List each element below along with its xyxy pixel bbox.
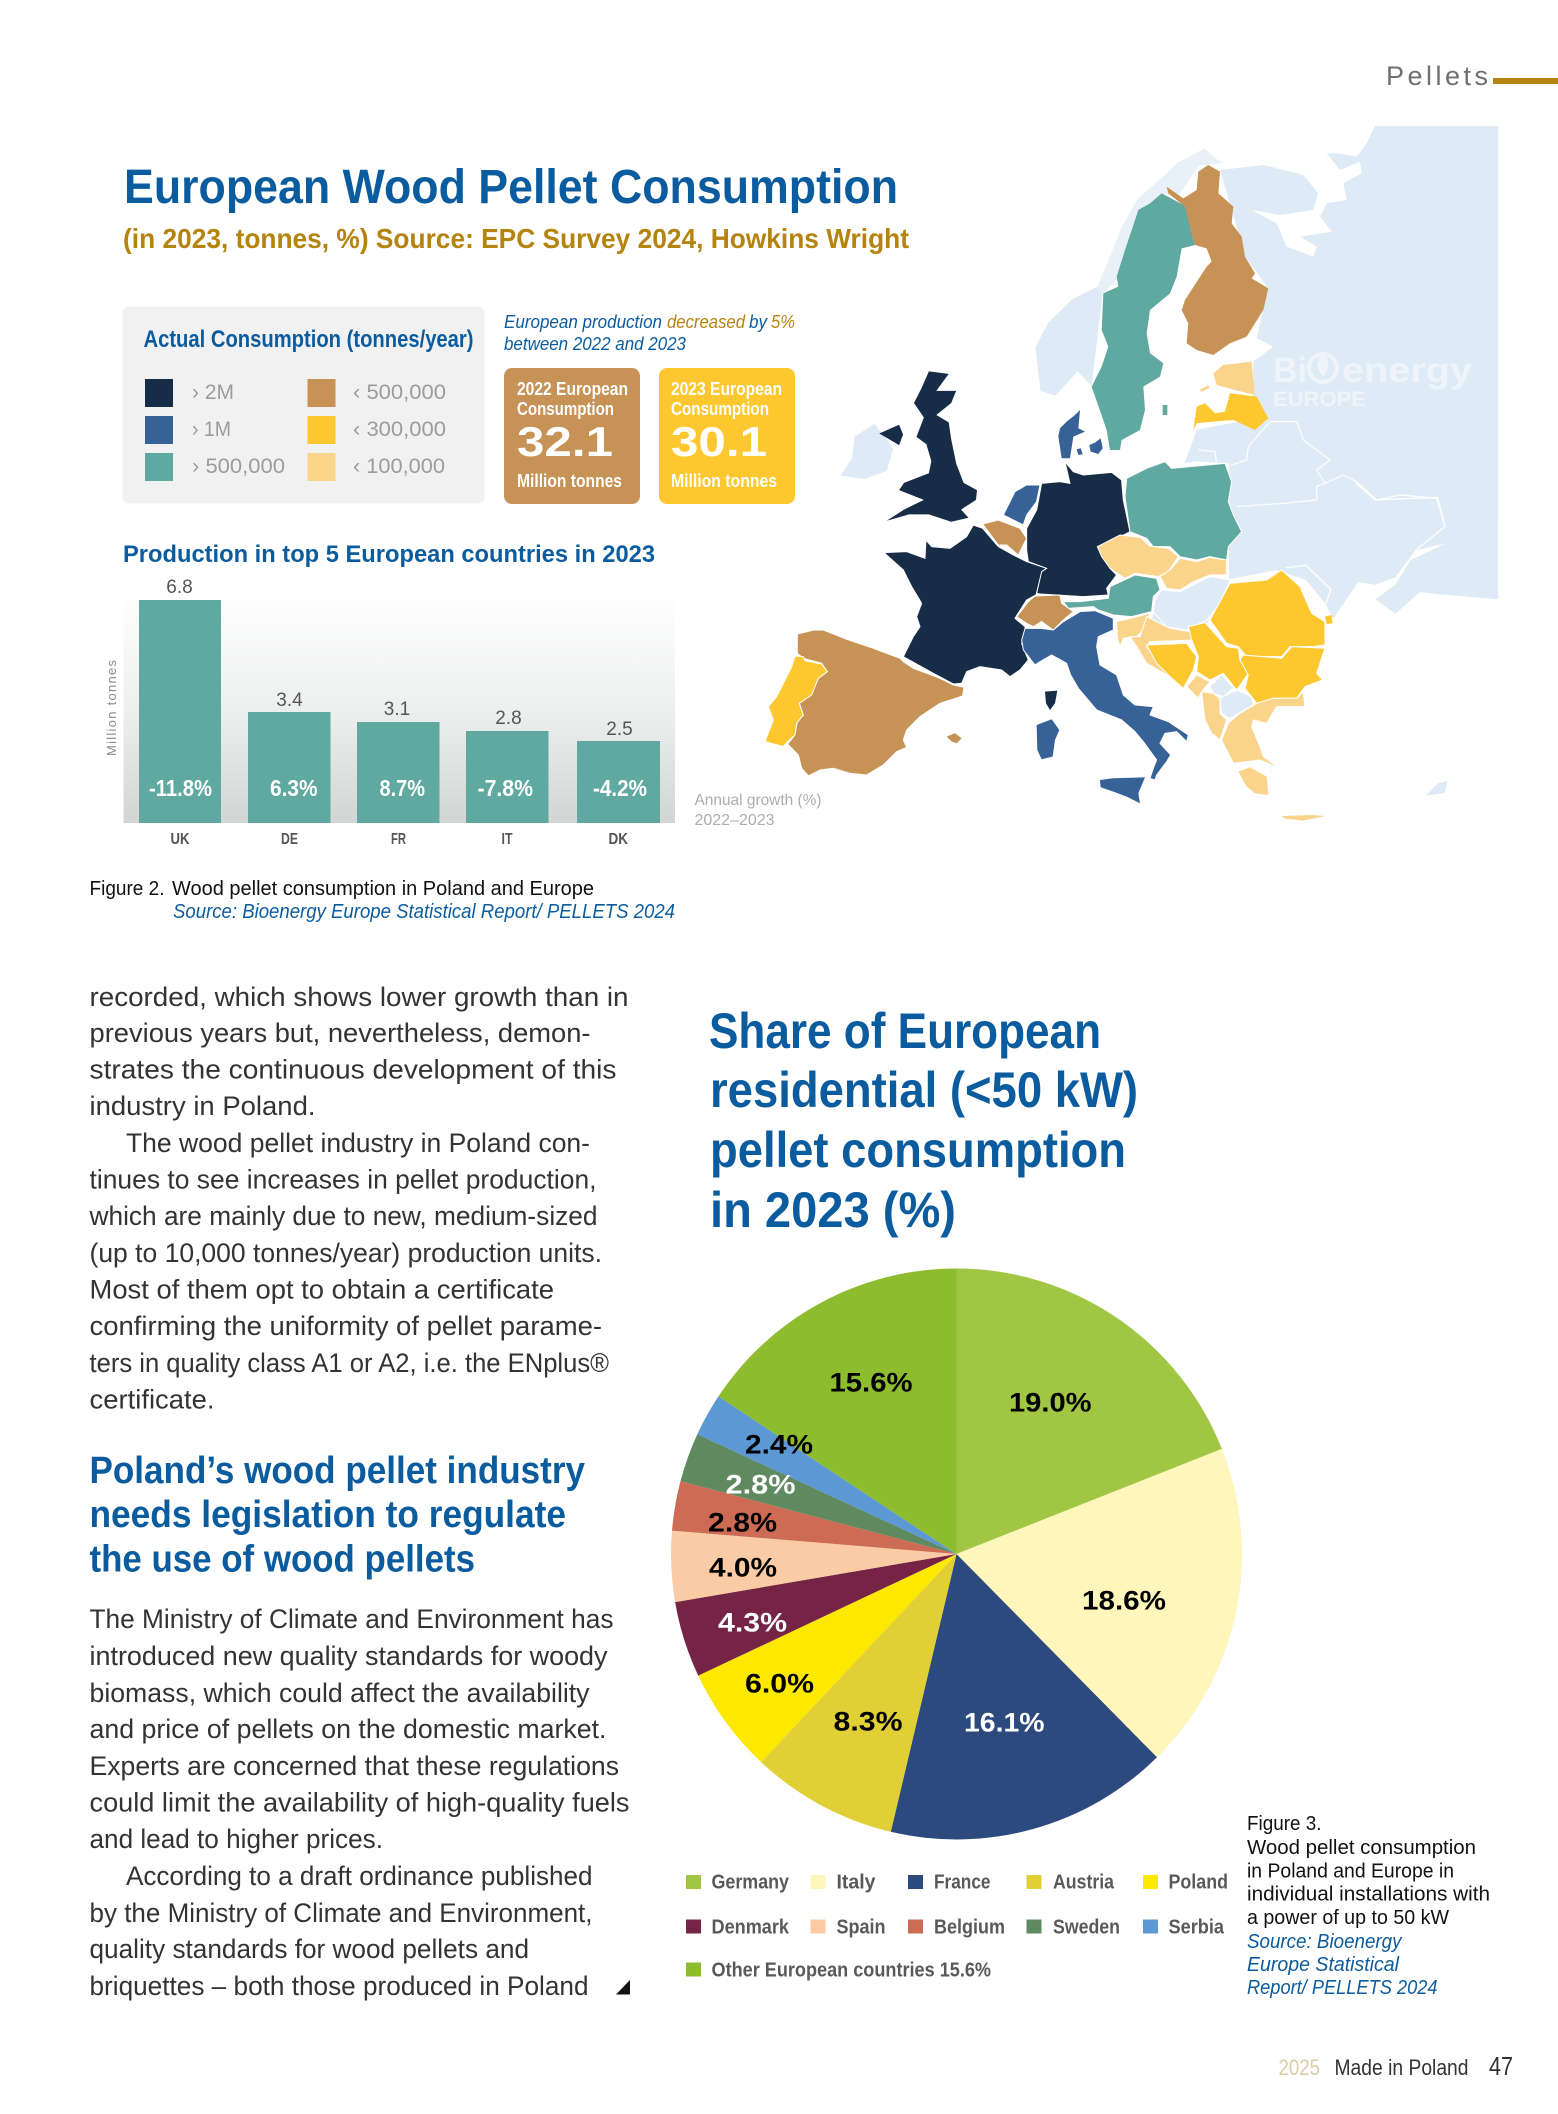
legend: Serbia: Serbia bbox=[1168, 1916, 1225, 1938]
figure 3 caption: Europe Statistical bbox=[1247, 1954, 1400, 1976]
map: western countries bbox=[765, 462, 1130, 776]
legend: Austria bbox=[1026, 1872, 1115, 1894]
slice: Sweden bbox=[680, 1434, 956, 1554]
slice: Italy bbox=[956, 1449, 1242, 1757]
text block: article intro: which are mainly due to new, medium-sized bbox=[89, 1201, 598, 1231]
country: Austria bbox=[1063, 575, 1160, 617]
text block: article intro: strates the continuous development of this bbox=[90, 1054, 616, 1084]
pie value labels: 4.3% bbox=[718, 1608, 787, 1638]
bar chart: production in top 5 countries bbox=[124, 577, 675, 848]
slice: Other European countries bbox=[718, 1268, 956, 1554]
page header: section name: Pellets bbox=[1386, 61, 1488, 91]
legend: Poland: Poland bbox=[1168, 1872, 1228, 1894]
legend: France: France bbox=[934, 1872, 990, 1894]
callout: production decrease note bbox=[504, 312, 795, 354]
legend: Germany: Germany bbox=[712, 1872, 790, 1894]
slice: Austria bbox=[761, 1554, 956, 1832]
country: Serbia bbox=[1188, 623, 1248, 690]
chart heading: Production in top 5 European countries in 2023 bbox=[123, 541, 655, 568]
pie chart: residential pellet consumption shares bbox=[671, 1268, 1242, 1839]
country: Denmark bbox=[1058, 410, 1085, 458]
text block: article intro: certificate. bbox=[90, 1384, 214, 1414]
text block: article continued: Experts are concerned that these regulations bbox=[90, 1751, 619, 1781]
map: Russia and north-east bbox=[1220, 126, 1498, 520]
text block: article intro: confirming the uniformity of pellet parame- bbox=[90, 1311, 602, 1341]
country: Peloponnese bbox=[1238, 767, 1268, 795]
page footer: Made in Poland bbox=[1334, 2055, 1468, 2080]
pie chart heading: residential (<50 kW) bbox=[710, 1062, 1138, 1118]
callout: production decrease note: decreased bbox=[667, 312, 746, 332]
legend entry: under 100,000 bbox=[308, 453, 445, 481]
text block: article intro: industry in Poland. bbox=[90, 1091, 316, 1121]
pie chart heading: pellet consumption bbox=[710, 1122, 1126, 1178]
country: Crete bbox=[1282, 815, 1325, 821]
bar: FR: 8.7% bbox=[380, 775, 425, 801]
bar: DK: 2.5 bbox=[606, 719, 633, 740]
country: Croatia bbox=[1130, 617, 1193, 688]
pie chart heading: Share of European bbox=[709, 1003, 1101, 1059]
country: Romania bbox=[1210, 570, 1325, 657]
legend entry: under 500,000 bbox=[308, 379, 446, 407]
text block: article intro: ters in quality class A1 or A2, i.e. the ENplus® bbox=[90, 1348, 609, 1378]
country: Montenegro bbox=[1187, 675, 1210, 698]
legend: Sweden: Sweden bbox=[1053, 1916, 1120, 1938]
legend entry: over 2M bbox=[145, 379, 234, 407]
country: Finland bbox=[1167, 165, 1268, 355]
country: Gotland bbox=[1163, 405, 1167, 415]
map: United Kingdom bbox=[879, 371, 977, 522]
figure 3 caption: Wood pellet consumption bbox=[1247, 1837, 1476, 1859]
pie value labels: 2.4% bbox=[745, 1430, 813, 1460]
country: Bosnia bbox=[1147, 643, 1197, 688]
country: Estonia bbox=[1213, 362, 1255, 395]
legend: Belgium: Belgium bbox=[934, 1916, 1005, 1938]
legend: Italy: Italy bbox=[836, 1872, 876, 1894]
figure 2 caption: Wood pellet consumption in Poland and Europe bbox=[172, 878, 594, 900]
stat card: 2023 consumption: Consumption bbox=[671, 399, 769, 419]
slice: France bbox=[891, 1554, 1157, 1839]
bar: FR: 3.1 bbox=[384, 699, 410, 720]
bar: FR: FR bbox=[391, 831, 406, 848]
bar: IT: IT bbox=[502, 831, 513, 848]
map: Belarus, Ukraine and Lithuania bbox=[1152, 342, 1498, 631]
bar: UK: UK bbox=[170, 831, 190, 848]
legend entry: under 300,000: ‹ 300,000 bbox=[353, 418, 446, 441]
legend entry: under 100,000: ‹ 100,000 bbox=[353, 455, 445, 478]
map: northern countries bbox=[1058, 165, 1268, 458]
section heading: the use of wood pellets bbox=[90, 1538, 475, 1580]
section heading bbox=[90, 1450, 585, 1580]
figure 3 caption: individual installations with bbox=[1247, 1884, 1490, 1906]
stat card: 2023 consumption bbox=[659, 368, 795, 504]
country: Portugal bbox=[765, 656, 827, 747]
country: Sicily bbox=[1100, 777, 1145, 803]
bar: DK: DK bbox=[608, 831, 628, 848]
figure 2 caption bbox=[90, 878, 675, 923]
legend entry: over 1M: › 1M bbox=[192, 418, 231, 441]
pie value labels bbox=[708, 1368, 1166, 1738]
page header: section name bbox=[1386, 61, 1558, 91]
bar: IT: -7.8% bbox=[478, 775, 533, 801]
title: European Wood Pellet Consumption bbox=[124, 161, 898, 214]
subtitle: (in 2023, tonnes, %) Source: EPC Survey 2024, Howkins Wright bbox=[123, 223, 909, 254]
map: Norway south bbox=[1036, 287, 1103, 396]
country: Sardinia bbox=[1037, 719, 1059, 759]
legend entry: over 1M bbox=[145, 416, 231, 444]
country: Greece bbox=[1222, 692, 1305, 768]
country: Kosovo bbox=[1210, 675, 1233, 697]
text block: article continued: The Ministry of Climate and Environment has bbox=[90, 1604, 614, 1634]
text block: article continued: and price of pellets on the domestic market. bbox=[90, 1714, 606, 1744]
legend entry: over 500,000: › 500,000 bbox=[192, 455, 285, 478]
pie value labels: 18.6% bbox=[1082, 1586, 1166, 1616]
country: Latvia bbox=[1193, 393, 1268, 430]
figure 3 caption: Report/ PELLETS 2024 bbox=[1247, 1977, 1438, 1999]
country: Spain bbox=[788, 630, 964, 776]
country: France bbox=[884, 525, 1047, 684]
map: watermark logo: EUROPE bbox=[1273, 388, 1366, 411]
legend: Serbia bbox=[1143, 1916, 1225, 1938]
pie value labels: 8.3% bbox=[834, 1706, 902, 1736]
page footer: 47 bbox=[1489, 2051, 1513, 2081]
text block: article intro: tinues to see increases in pellet production, bbox=[90, 1164, 596, 1194]
page footer bbox=[1278, 2051, 1513, 2081]
stat card: 2022 consumption: Consumption bbox=[517, 399, 614, 419]
legend: France bbox=[908, 1872, 990, 1894]
legend: Spain bbox=[810, 1916, 886, 1938]
map: Ireland bbox=[841, 424, 893, 479]
legend: Denmark: Denmark bbox=[712, 1916, 790, 1938]
country: Germany bbox=[1027, 462, 1130, 597]
bar: IT bbox=[466, 708, 548, 848]
bar: DK bbox=[577, 719, 660, 848]
legend: Germany bbox=[686, 1872, 790, 1894]
legend entry: under 300,000 bbox=[308, 416, 446, 444]
bar: UK bbox=[139, 577, 221, 848]
text block: article intro bbox=[89, 982, 628, 1414]
figure 2 caption: Figure 2. bbox=[90, 878, 164, 900]
text block: article intro: previous years but, nevertheless, demon- bbox=[90, 1018, 590, 1048]
stat card: 2023 consumption: 2023 European bbox=[671, 379, 782, 399]
country: Bulgaria bbox=[1240, 647, 1325, 703]
text block: article continued: and lead to higher prices. bbox=[90, 1824, 383, 1854]
bar: DE: DE bbox=[281, 831, 298, 848]
text block: article continued: briquettes – both those produced in Poland bbox=[90, 1971, 588, 2001]
pie legend bbox=[686, 1872, 1228, 1982]
country: Switzerland bbox=[1017, 595, 1073, 630]
legend: Other European countries: Other European countries 15.6% bbox=[712, 1960, 991, 1982]
pie value labels: 15.6% bbox=[830, 1368, 912, 1398]
country: Corsica bbox=[1045, 691, 1057, 710]
text block: article continued bbox=[90, 1604, 630, 2001]
figure 3 caption: Figure 3. bbox=[1247, 1813, 1322, 1835]
legend: Belgium bbox=[908, 1916, 1005, 1938]
stat card: 2023 consumption: Million tonnes bbox=[671, 471, 777, 491]
section heading: Poland’s wood pellet industry bbox=[90, 1450, 585, 1492]
bar: IT: 2.8 bbox=[495, 708, 522, 729]
callout: production decrease note: by bbox=[749, 312, 768, 332]
section heading: needs legislation to regulate bbox=[90, 1494, 566, 1536]
pie value labels: 4.0% bbox=[709, 1552, 777, 1582]
note: annual growth: 2022–2023 bbox=[694, 812, 775, 829]
country: Hungary bbox=[1153, 577, 1230, 630]
figure 3 caption bbox=[1247, 1813, 1490, 1999]
map: watermark logo: Bi bbox=[1273, 351, 1307, 390]
country: Netherlands bbox=[1003, 485, 1040, 525]
country: Slovenia bbox=[1117, 613, 1150, 647]
map: Norway north bbox=[1098, 148, 1222, 294]
legend entry: over 500,000 bbox=[145, 453, 285, 481]
pie chart heading bbox=[709, 1003, 1138, 1238]
map: central and southern countries bbox=[1022, 462, 1333, 821]
pie chart heading: in 2023 (%) bbox=[710, 1182, 956, 1238]
bar: FR bbox=[357, 699, 440, 848]
text block: article intro: recorded, which shows lower growth than in bbox=[90, 982, 628, 1012]
legend: Italy bbox=[810, 1872, 876, 1894]
callout: production decrease note: between 2022 and 2023 bbox=[504, 334, 686, 354]
legend: Sweden bbox=[1026, 1916, 1120, 1938]
text block: article continued: According to a draft ordinance published bbox=[126, 1861, 592, 1891]
slice: Spain bbox=[671, 1531, 956, 1602]
text block: article continued: by the Ministry of Climate and Environment, bbox=[90, 1898, 592, 1928]
bar: UK: 6.8 bbox=[166, 577, 193, 598]
country: Czechia bbox=[1097, 535, 1178, 578]
pie value labels: 6.0% bbox=[745, 1668, 814, 1698]
map of Europe bbox=[765, 126, 1498, 821]
slice: Denmark bbox=[675, 1554, 956, 1676]
figure 3 caption: a power of up to 50 kW bbox=[1247, 1907, 1449, 1929]
callout: production decrease note: 5% bbox=[771, 312, 795, 332]
country: Belgium bbox=[983, 520, 1027, 555]
text block: article continued: quality standards for wood pellets and bbox=[90, 1934, 529, 1964]
note: annual growth: Annual growth (%) bbox=[694, 792, 822, 809]
text block: article intro: Most of them opt to obtain a certificate bbox=[90, 1274, 554, 1304]
country: Poland bbox=[1125, 462, 1242, 560]
slice: Germany bbox=[956, 1268, 1222, 1554]
legend entry: over 2M: › 2M bbox=[192, 381, 234, 404]
axis label: Million tonnes bbox=[104, 660, 119, 756]
text block: article intro: The wood pellet industry in Poland con- bbox=[126, 1128, 590, 1158]
slice: Poland bbox=[698, 1554, 956, 1762]
pie value labels: 16.1% bbox=[964, 1708, 1044, 1738]
map: Cyprus area bbox=[1426, 781, 1447, 796]
map: watermark logo bbox=[1273, 351, 1473, 411]
map: watermark logo: energy bbox=[1342, 351, 1473, 390]
bar: DE: 3.4 bbox=[276, 690, 303, 711]
stat card: 2022 consumption bbox=[504, 368, 640, 504]
page footer: 2025 bbox=[1278, 2055, 1320, 2080]
country: Italy bbox=[1022, 611, 1188, 780]
legend entry: under 500,000: ‹ 500,000 bbox=[353, 381, 446, 404]
country: North Macedonia bbox=[1220, 690, 1253, 718]
country: Balearic islands bbox=[947, 733, 962, 743]
text block: article intro: (up to 10,000 tonnes/year) production units. bbox=[90, 1238, 602, 1268]
slice: Serbia bbox=[697, 1396, 956, 1554]
map: borders in the east bbox=[1198, 422, 1443, 520]
callout: production decrease note: European production bbox=[504, 312, 662, 332]
map: non-reporting countries (light) bbox=[841, 148, 1498, 796]
figure 3 caption: Source: Bioenergy bbox=[1247, 1931, 1402, 1953]
country: Sweden bbox=[1092, 193, 1195, 450]
pie value labels: 2.8% bbox=[726, 1470, 796, 1500]
figure 3 caption: in Poland and Europe in bbox=[1247, 1860, 1454, 1882]
bar: DK: -4.2% bbox=[593, 775, 647, 801]
country: Slovakia bbox=[1160, 557, 1227, 590]
stat card: 2022 consumption: Million tonnes bbox=[517, 471, 622, 491]
bar: DE: 6.3% bbox=[270, 775, 318, 801]
note: annual growth bbox=[694, 792, 822, 829]
stat card: 2022 consumption: 32.1 bbox=[517, 418, 613, 465]
text block: article continued: introduced new quality standards for woody bbox=[90, 1641, 608, 1671]
stat card: 2022 consumption: 2022 European bbox=[517, 379, 628, 399]
slice: Belgium bbox=[672, 1481, 956, 1554]
country: Albania bbox=[1202, 692, 1227, 740]
legend: Poland bbox=[1143, 1872, 1228, 1894]
text block: article continued: biomass, which could affect the availability bbox=[90, 1678, 590, 1708]
panel: consumption legend bbox=[122, 306, 484, 504]
pie value labels: 19.0% bbox=[1009, 1388, 1092, 1418]
icon: continuation triangle bbox=[616, 1980, 630, 1994]
legend: Austria: Austria bbox=[1053, 1872, 1115, 1894]
pie value labels: 2.8% bbox=[708, 1508, 777, 1538]
bar: UK: -11.8% bbox=[149, 775, 212, 801]
legend heading: Actual Consumption (tonnes/year) bbox=[144, 326, 474, 353]
legend: Spain: Spain bbox=[836, 1916, 886, 1938]
bar: DE bbox=[248, 690, 330, 848]
stat card: 2023 consumption: 30.1 bbox=[671, 418, 767, 465]
text block: article continued: could limit the availability of high-quality fuels bbox=[90, 1788, 630, 1818]
figure 2 caption: Source: Bioenergy Europe Statistical Report/ PELLETS 2024 bbox=[173, 901, 675, 923]
